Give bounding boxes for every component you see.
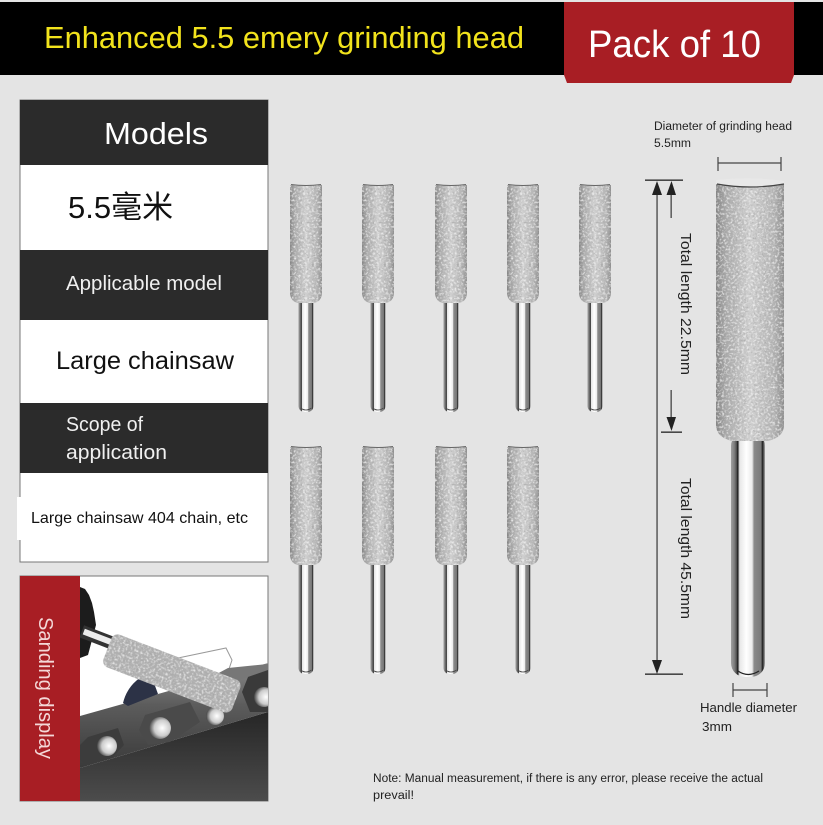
handle diameter label: 3mm [702, 719, 732, 734]
large bit [716, 178, 784, 677]
head diameter marker [718, 157, 781, 171]
pack badge [564, 2, 794, 83]
rivets [97, 736, 117, 756]
diameter label: Diameter of grinding head [654, 121, 792, 133]
label: total length 22.5mm: Total length 22.5mm [677, 233, 693, 375]
bit head [101, 632, 243, 715]
pack badge: Pack of 10 [588, 24, 761, 66]
handle diameter marker [733, 683, 767, 697]
models header [20, 100, 268, 165]
shaft [80, 626, 113, 648]
bits: row 2 [290, 446, 539, 674]
bit 5 [579, 184, 611, 412]
scope header [20, 403, 268, 473]
diameter label: 5.5mm [654, 138, 691, 150]
bit 3 [435, 184, 467, 412]
applicable model header: Applicable model [66, 273, 222, 295]
bit 8 [435, 446, 467, 674]
label: Sanding display [34, 617, 57, 760]
models header: Models [104, 116, 208, 151]
panel: sanding display [20, 576, 274, 801]
dimension arrows [645, 180, 683, 675]
scope value: Large chainsaw 404 chain, etc [31, 510, 248, 527]
scope header: application [66, 442, 167, 464]
title: Enhanced 5.5 emery grinding head [44, 20, 524, 55]
bit 9 [507, 446, 539, 674]
panel: specification table [17, 100, 268, 562]
cutter [123, 679, 158, 706]
header bar [0, 2, 823, 75]
model value: 5.5毫米 [68, 190, 173, 225]
handle diameter label [700, 700, 798, 734]
bit 2 [362, 184, 394, 412]
scope header: Scope of [66, 414, 143, 436]
bit 7 [362, 446, 394, 674]
bit 1 [290, 184, 322, 412]
applicable model header [20, 250, 268, 320]
diameter label [654, 121, 792, 150]
bits: row 1 [290, 184, 611, 412]
handle diameter label: Handle diameter [700, 700, 798, 715]
bit 4 [507, 184, 539, 412]
note: prevail! [373, 790, 414, 802]
chain [80, 663, 268, 768]
label [20, 576, 80, 801]
label: total length 45.5mm: Total length 45.5mm [677, 478, 693, 619]
bit 6 [290, 446, 322, 674]
note [373, 773, 763, 802]
applicable model value: Large chainsaw [56, 347, 235, 375]
note: Note: Manual measurement, if there is any error, please receive the actual [373, 773, 763, 785]
wheel [80, 587, 96, 658]
scope value [17, 497, 248, 540]
photo: bit on chain [79, 587, 274, 801]
guide bar [80, 712, 268, 801]
